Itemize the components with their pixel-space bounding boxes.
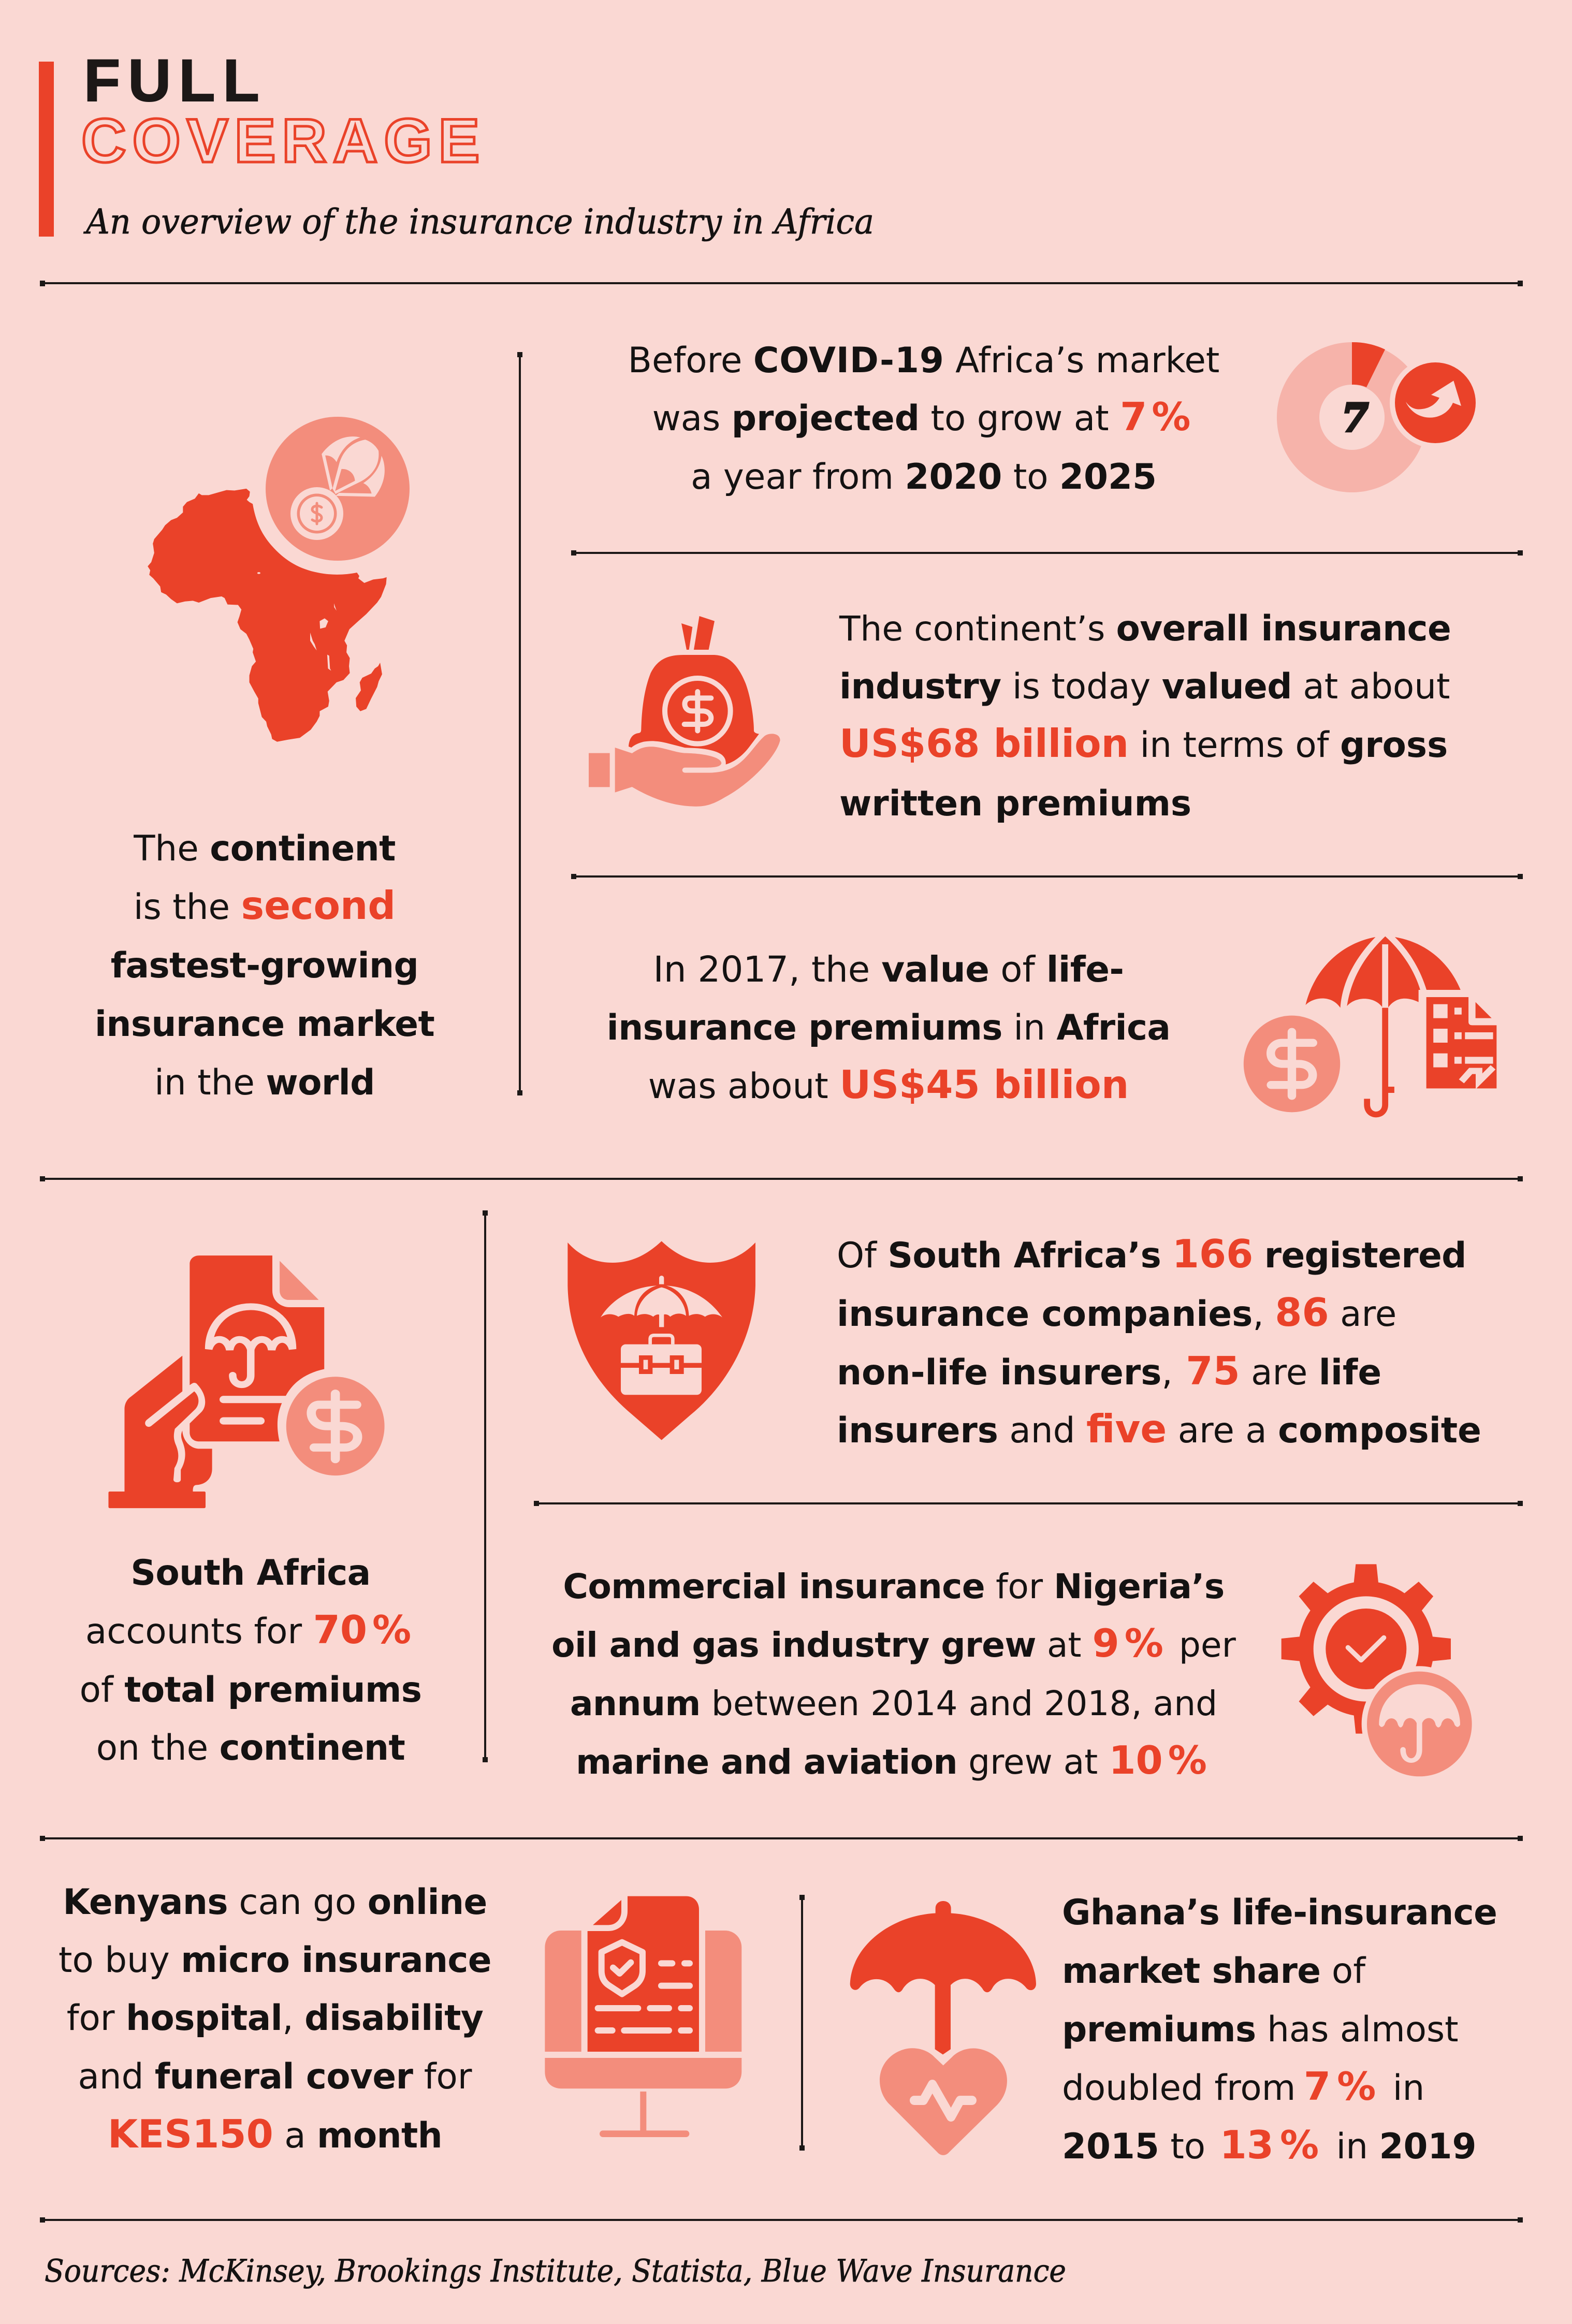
text: Nigeria commercial insurance: oil and gas industry grew at 9% per [551,1620,1236,1666]
text: South Africa 70 percent: on the continent [96,1727,405,1768]
icon: Africa map with parachute coin [148,417,410,742]
icon: umbrella, coin and document [1244,937,1496,1117]
icon: hand holding insurance document with coin [108,1255,385,1508]
text: South Africa 70 percent: of total premiums [80,1669,421,1710]
text: Kenyans micro insurance: to buy micro insurance [59,1939,491,1980]
text: life-insurance premiums: insurance premiums in Africa [607,1007,1170,1048]
title: COVERAGE: COVERAGE [81,106,486,176]
icon: computer with policy document [545,1896,741,2137]
sources: Sources: McKinsey, Brookings Institute, Statista, Blue Wave Insurance [45,2253,1066,2289]
text: Ghana life-insurance: premiums has almost [1062,2009,1459,2050]
text: South Africa's registered insurers: Of South Africa’s 166 registered [837,1231,1466,1277]
icon: money bag on hand [589,616,780,807]
text: Ghana life-insurance: market share of [1062,1950,1365,1991]
text: life-insurance premiums: was about US$45 billion [648,1062,1129,1107]
text: US$68 billion: The continent’s overall insurance [839,608,1451,649]
text: US$68 billion: US$68 billion in terms of gross [839,721,1448,766]
subtitle: An overview of the insurance industry in Africa [83,202,874,242]
text: COVID-19 projection: a year from 2020 to 2025 [691,456,1157,497]
text: continent second fastest-growing: is the second [134,883,396,928]
text: continent second fastest-growing: insurance market [95,1003,434,1044]
text: Nigeria commercial insurance: Commercial insurance for Nigeria’s [563,1567,1225,1606]
text: US$68 billion: written premiums [839,783,1191,824]
title block [39,48,874,242]
text: US$68 billion: industry is today valued at about [839,666,1450,707]
text: South Africa's registered insurers: non-life insurers, 75 are life [837,1348,1381,1394]
text: COVID-19 projection: Before COVID-19 Africa’s market [628,340,1219,381]
text: Kenyans micro insurance: KES150 a month [108,2111,442,2157]
title: FULL: FULL [84,48,267,114]
text: Ghana life-insurance: doubled from 7% in [1062,2064,1424,2109]
text: Nigeria commercial insurance: annum between 2014 and 2018, and [570,1684,1217,1723]
icon: 7 percent donut with arrow: 7 [1342,396,1369,441]
text: South Africa 70 percent: accounts for 70% [85,1607,416,1653]
text: Kenyans micro insurance: for hospital, disability [67,1997,483,2038]
text: continent second fastest-growing: fastest-growing [111,945,418,986]
text: COVID-19 projection: was projected to grow at 7% [652,394,1195,440]
text: Nigeria commercial insurance: marine and aviation grew at 10% [576,1737,1212,1783]
text: South Africa's registered insurers: insurance companies, 86 are [837,1290,1396,1335]
text: life-insurance premiums: In 2017, the value of life- [653,949,1124,990]
icon: umbrella over heart [850,1901,1036,2155]
text: Ghana life-insurance: 2015 to 13% in 2019 [1062,2122,1476,2168]
text: Kenyans micro insurance: Kenyans can go online [63,1881,487,1922]
text: South Africa 70 percent: South Africa [130,1552,371,1593]
text: continent second fastest-growing: in the world [154,1062,375,1103]
text: South Africa's registered insurers: insurers and five are a composite [837,1406,1481,1452]
text: Kenyans micro insurance: and funeral cover for [78,2056,472,2097]
icon: 7 percent donut with arrow [1277,342,1481,492]
title accent bar [39,62,54,237]
text: Ghana life-insurance: Ghana’s life-insurance [1062,1892,1497,1933]
text: continent second fastest-growing: The continent [134,828,396,869]
icon: shield with umbrella and briefcase [567,1241,755,1440]
icon: gear with umbrella [1282,1564,1477,1782]
